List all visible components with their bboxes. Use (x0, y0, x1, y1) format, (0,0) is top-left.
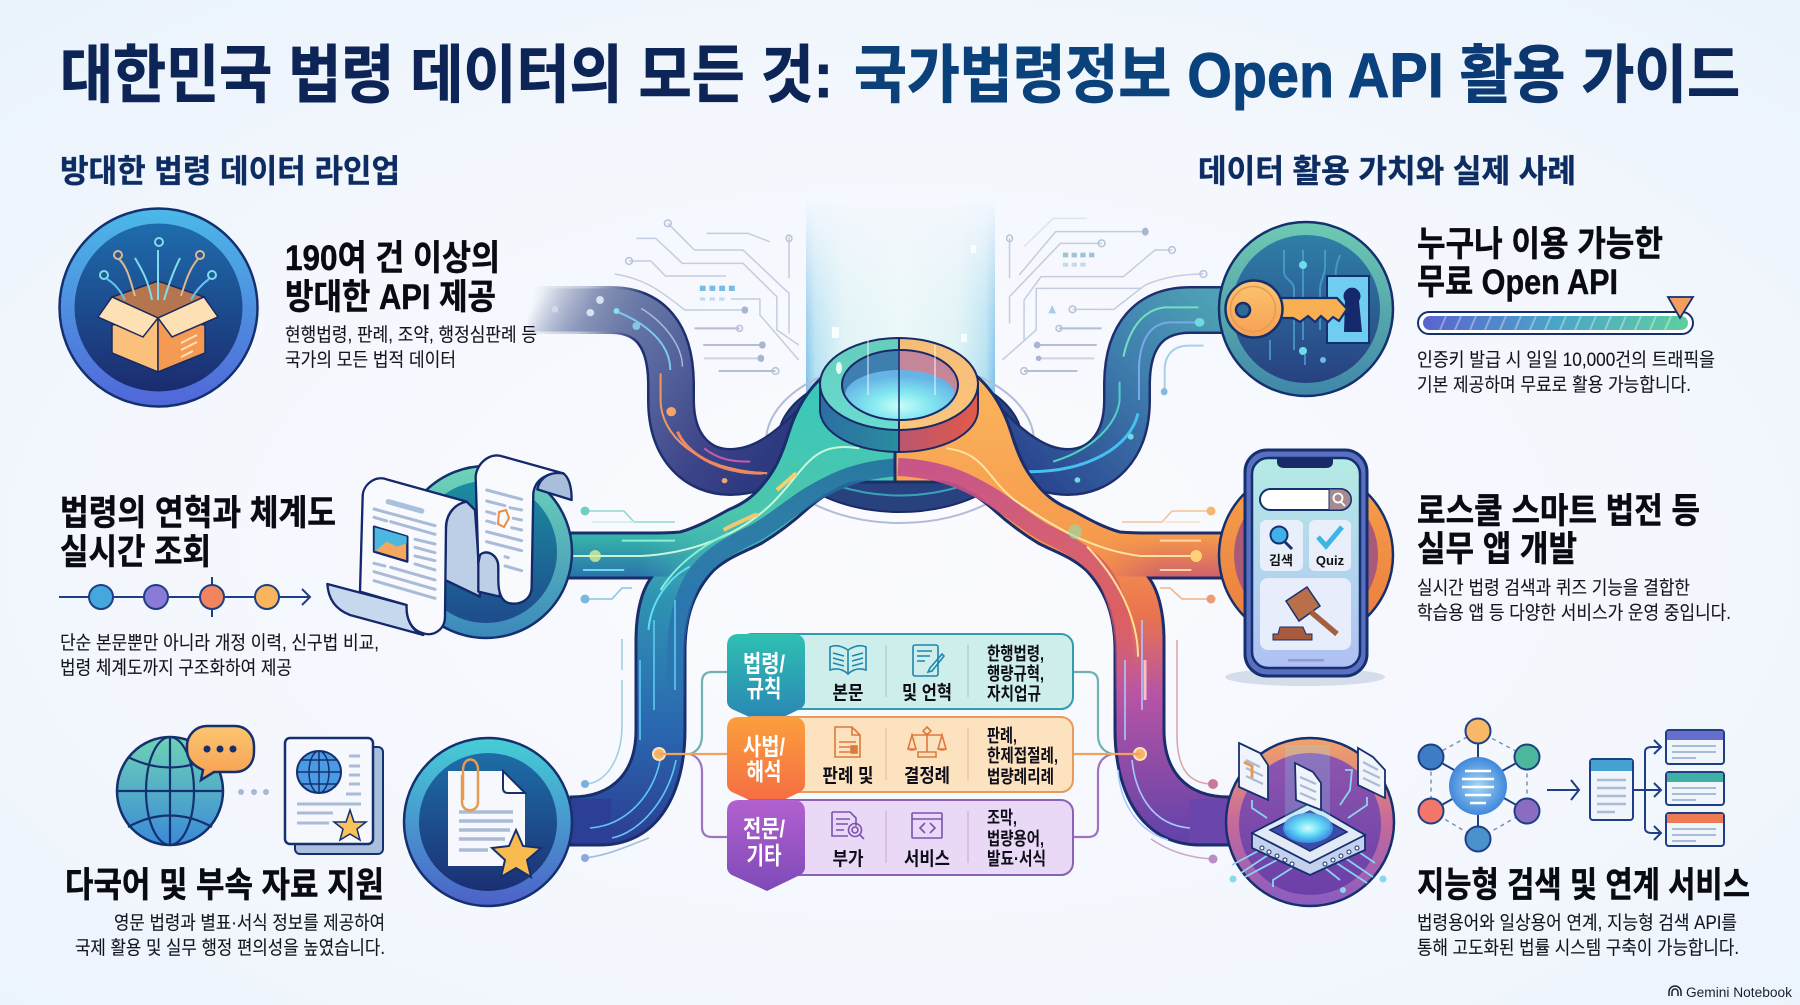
text block: free API description: 기본 제공하며 무료로 활용 가능합니다. (1417, 374, 1691, 396)
text block: multilanguage heading: 다국어 및 부속 자료 지원 (65, 866, 384, 905)
text block: multilanguage description: 국제 활용 및 실무 행정 편의성을 높였습니다. (75, 937, 385, 959)
connectors from table to pipes (659, 672, 1140, 837)
row: 사법/해석: 사법/ (743, 734, 785, 761)
dots (238, 789, 269, 795)
text block: history description (60, 632, 379, 679)
text block: search description (1417, 912, 1739, 959)
row: 법령/규칙: 한행법령, (987, 644, 1044, 664)
text block: app description (1417, 577, 1731, 624)
row: 전문/기타 (727, 800, 1073, 891)
icon: document search (832, 812, 864, 839)
icon: smartphone app: Quiz (1316, 553, 1345, 568)
row: 사법/해석 (727, 717, 1073, 808)
pipe: upper left to API box (528, 296, 812, 483)
heading: left section: 방대한 법령 데이터 라인업 (60, 153, 400, 189)
text block: history description: 단순 본문뿐만 아니라 개정 이력, 신구법 비교, (60, 632, 379, 654)
title (60, 41, 1740, 111)
icon: document with globe and star (285, 738, 383, 854)
text block: multilanguage description: 영문 법령과 별표·서식 정보를 제공하여 (114, 912, 385, 934)
row: 법령/규칙: 및 언혁 (902, 682, 952, 704)
row: 법령/규칙: 행량규혁, (987, 664, 1044, 684)
text block: API description: 국가의 모든 법적 데이터 (285, 349, 456, 371)
icon: code window (912, 813, 942, 838)
row: 사법/해석: 판례 및 (822, 765, 874, 787)
panel: 지능형 검색 (1226, 718, 1750, 959)
text block: free API description: 인증키 발급 시 일일 10,000건의 트래픽을 (1417, 349, 1715, 371)
text block: history heading (60, 494, 336, 572)
icon: chip with documents (1226, 738, 1394, 906)
row: 법령/규칙 (727, 634, 1073, 725)
text block: free API description (1417, 349, 1715, 396)
text block: free API heading: 누구나 이용 가능한 (1417, 225, 1663, 264)
text block: history heading: 실시간 조회 (60, 533, 211, 572)
title: 국가법령정보 Open API 활용 가이드 (854, 41, 1740, 111)
row: 전문/기타: 서비스 (904, 848, 950, 870)
icon: scroll document (327, 455, 572, 638)
row: 법령/규칙: 규칙 (746, 676, 782, 703)
pipe: main right branch (895, 374, 1232, 845)
icon: globe with speech bubble (117, 726, 254, 845)
text block: history heading: 법령의 연혁과 체계도 (60, 494, 336, 533)
central hub ring (820, 245, 978, 452)
panel: 다국어 및 부속 자료 (65, 726, 572, 959)
panel: 무료 Open API (1219, 222, 1715, 396)
icon: paper with clip and star (404, 738, 572, 906)
icon: open box (60, 208, 258, 406)
circuit lines: left (615, 220, 799, 374)
side circuit accents (580, 506, 1218, 864)
row: 전문/기타: 발됴·서식 (987, 849, 1046, 869)
row: 법령/규칙: 자치업규 (987, 684, 1041, 704)
row: 전문/기타: 부가 (832, 848, 864, 870)
icon: scales (908, 727, 946, 757)
circuit lines: right (1002, 218, 1207, 395)
text block: API heading (285, 239, 500, 317)
text block: API description (285, 324, 537, 371)
pipe: upper right to key (988, 307, 1225, 483)
row: 사법/해석: 해석 (746, 759, 782, 786)
title: 대한민국 법령 데이터의 모든 것: (60, 41, 833, 111)
icon: smartphone app: 김색 (1269, 553, 1293, 568)
chart: timeline (59, 577, 310, 617)
text block: API heading: 방대한 API 제공 (285, 278, 496, 317)
chart: network and data flow (1418, 718, 1724, 852)
text block: history description: 법령 체계도까지 구조화하여 제공 (60, 657, 292, 679)
panel: data category table (727, 634, 1073, 891)
text block: app heading: 실무 앱 개발 (1417, 530, 1577, 569)
text block: API description: 현행법령, 판례, 조약, 행정심판례 등 (285, 324, 537, 346)
text block: search description: 법령용어와 일상용어 연계, 지능형 검색 API를 (1417, 912, 1737, 934)
central light beam (806, 210, 995, 394)
text block: app heading: 로스쿨 스마트 법전 등 (1417, 492, 1700, 531)
row: 전문/기타: 전문/ (743, 816, 785, 843)
watermark: Gemini Notebook: Gemini Notebook (1686, 985, 1792, 1000)
row: 사법/해석: 결정례 (904, 765, 950, 787)
text block: API heading: 190여 건 이상의 (285, 239, 500, 278)
icon: smartphone app (1219, 450, 1393, 686)
text block: search description: 통해 고도화된 법률 시스템 구축이 가능합니다. (1417, 937, 1739, 959)
text block: search heading: 지능형 검색 및 연계 서비스 (1417, 866, 1750, 905)
panel: 연혁과 체계도 (59, 455, 572, 679)
row: 사법/해석: 한제접절례, (987, 746, 1058, 766)
row: 사법/해석: 판례, (987, 726, 1017, 746)
text block: free API heading (1417, 225, 1663, 302)
heading: right section: 데이터 활용 가치와 실제 사례 (1198, 153, 1576, 189)
row: 법령/규칙: 법령/ (743, 651, 785, 678)
icon: key and keyhole (1219, 222, 1393, 396)
row: 전문/기타: 기타 (746, 843, 782, 870)
row: 전문/기타: 조막, (987, 808, 1017, 828)
panel: 190여 건 API (60, 208, 537, 406)
text block: app description: 학습용 앱 등 다양한 서비스가 운영 중입니다. (1417, 602, 1731, 624)
row: 법령/규칙: 본문 (832, 683, 864, 704)
chart: traffic progress bar (1418, 297, 1693, 334)
icon: open book (830, 646, 866, 674)
panel: 로스쿨 스마트 법전 (1219, 450, 1731, 686)
pipe: main left branch (568, 374, 905, 845)
text block: multilanguage description (75, 912, 385, 959)
icon: note with pencil (913, 645, 944, 676)
row: 사법/해석: 법량례리례 (987, 767, 1054, 787)
text block: free API heading: 무료 Open API (1417, 263, 1618, 302)
text block: app heading (1417, 492, 1700, 569)
base disc of central hub (766, 361, 1034, 523)
icon: case document (835, 727, 860, 757)
row: 전문/기타: 법량용어, (987, 829, 1044, 849)
text block: app description: 실시간 법령 검색과 퀴즈 기능을 결합한 (1417, 577, 1690, 599)
